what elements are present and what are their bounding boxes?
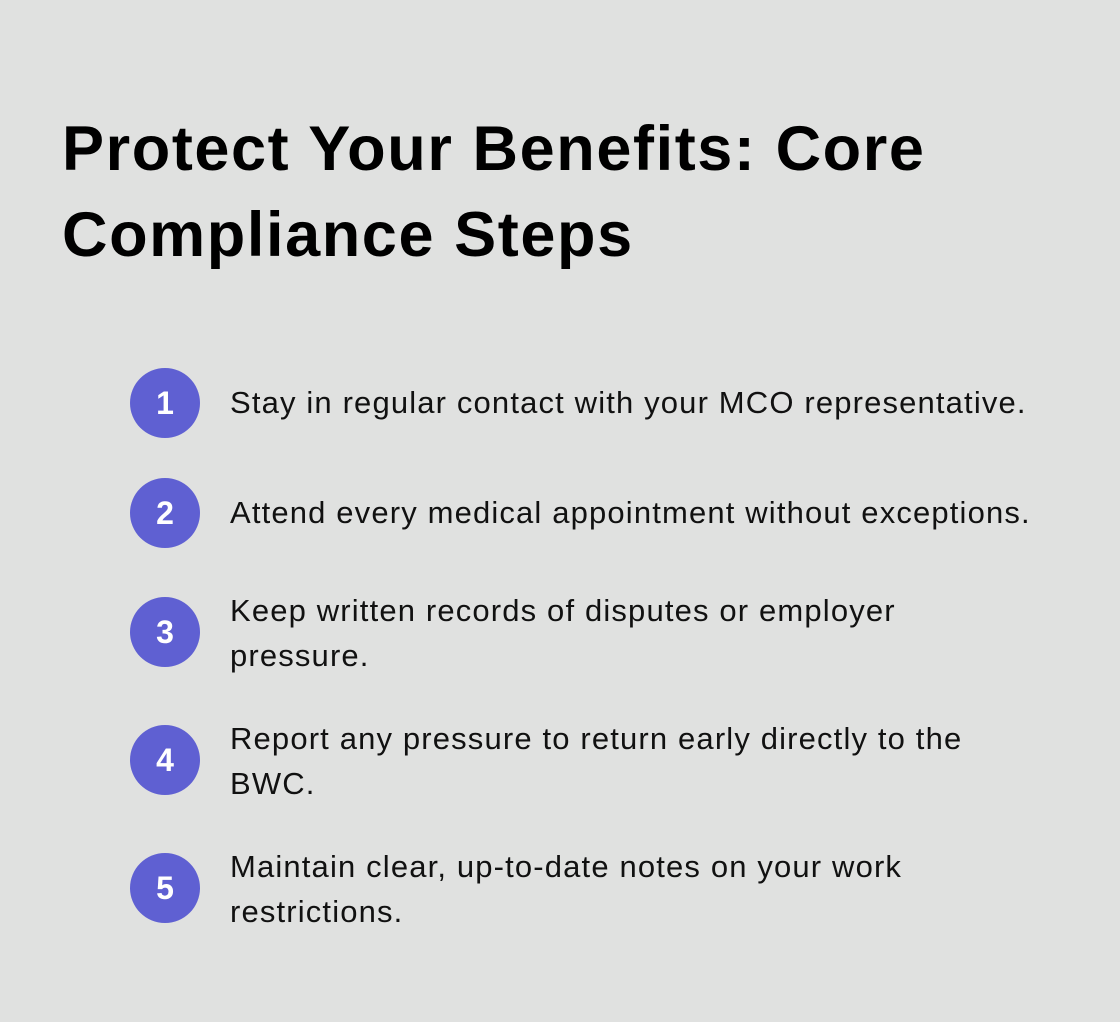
title: Compliance Steps: [62, 200, 634, 270]
step 2: [130, 478, 1031, 548]
icon: number 2: [130, 478, 200, 548]
icon: number 5: 5: [156, 870, 174, 906]
step 1: [130, 368, 1027, 438]
text: step 1: Stay in regular contact with your MCO representative.: [230, 385, 1027, 420]
text: step 3: [230, 593, 896, 673]
text: step 5: restrictions.: [230, 894, 403, 929]
icon: number 3: [130, 597, 200, 667]
title: Protect Your Benefits: Core: [62, 114, 926, 184]
text: step 3: Keep written records of disputes or employer: [230, 593, 896, 628]
text: step 4: [230, 721, 962, 801]
text: step 4: Report any pressure to return early directly to the: [230, 721, 962, 756]
icon: number 1: [130, 368, 200, 438]
icon: number 4: 4: [156, 742, 174, 778]
step 4: [130, 721, 962, 801]
icon: number 1: 1: [156, 385, 174, 421]
text: step 4: BWC.: [230, 766, 316, 801]
icon: number 2: 2: [156, 495, 174, 531]
icon: number 3: 3: [156, 614, 174, 650]
text: step 5: [230, 849, 902, 929]
icon: number 5: [130, 853, 200, 923]
text: step 5: Maintain clear, up-to-date notes on your work: [230, 849, 902, 884]
text: step 2: Attend every medical appointment without exceptions.: [230, 495, 1031, 530]
step 3: [130, 593, 896, 673]
text: step 3: pressure.: [230, 638, 370, 673]
title: [62, 114, 926, 270]
icon: number 4: [130, 725, 200, 795]
step 5: [130, 849, 902, 929]
